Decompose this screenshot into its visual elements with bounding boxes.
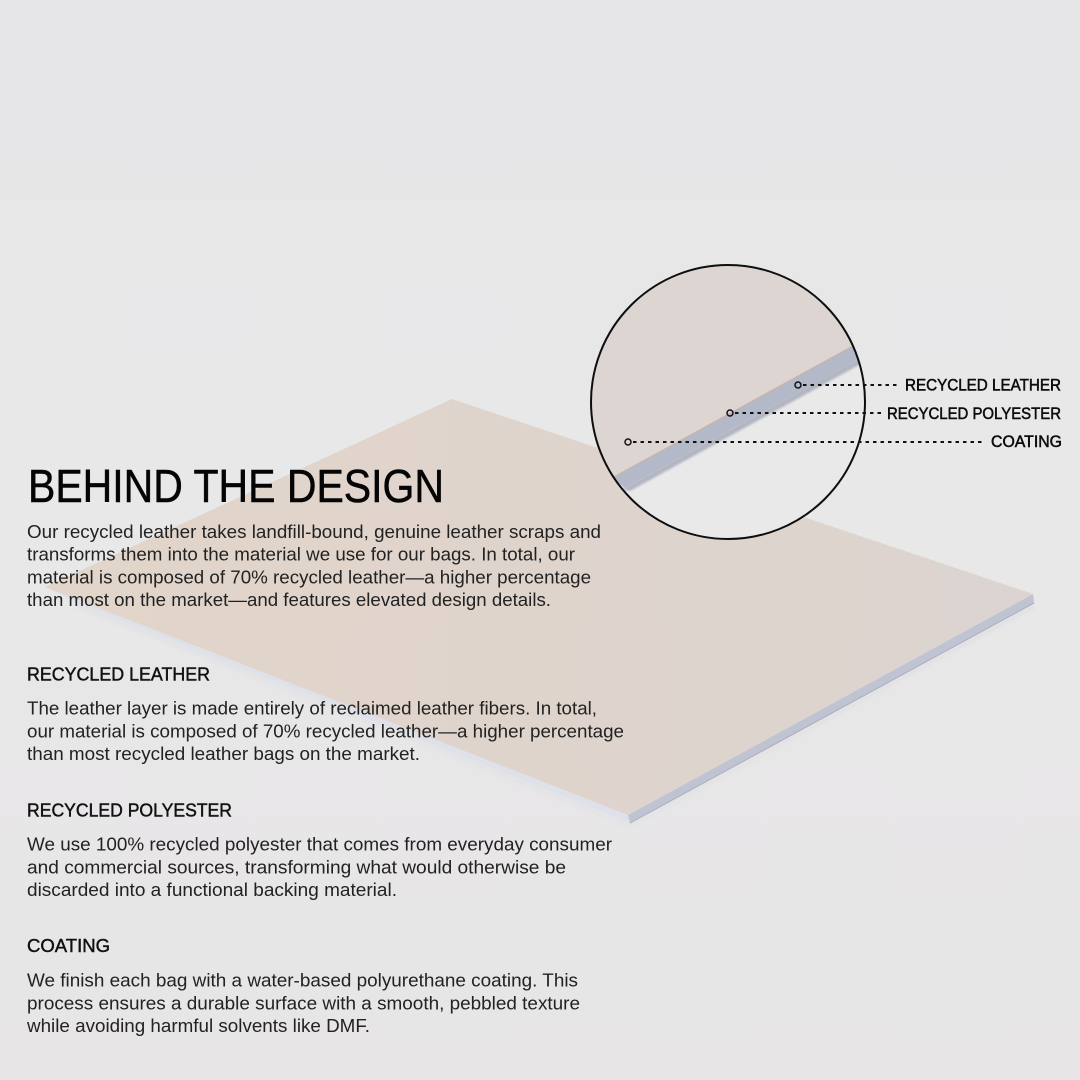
- intro text: [27, 521, 601, 610]
- callout: recycled leather: RECYCLED LEATHER: [905, 376, 1061, 394]
- text: recycled leather: The leather layer is made entirely of reclaimed leather fibers. In total,: [27, 698, 597, 718]
- text: recycled leather: our material is composed of 70% recycled leather—a higher percentage: [27, 720, 624, 742]
- text: recycled leather: [27, 698, 624, 764]
- text: recycled polyester: We use 100% recycled polyester that comes from everyday consumer: [27, 834, 612, 854]
- text: recycled polyester: discarded into a functional backing material.: [27, 879, 397, 900]
- heading: recycled polyester: RECYCLED POLYESTER: [27, 800, 232, 820]
- magnifier circle: [590, 264, 866, 540]
- text: coating: process ensures a durable surface with a smooth, pebbled texture: [27, 992, 580, 1014]
- text: coating: [26, 970, 580, 1036]
- callout: coating: [625, 432, 1062, 451]
- callout: coating: COATING: [991, 432, 1062, 451]
- magnified layers edge: [612, 346, 860, 488]
- text: recycled polyester: and commercial sources, transforming what would otherwise be: [27, 856, 566, 878]
- text: recycled polyester: [27, 834, 612, 900]
- text: coating: We finish each bag with a water-based polyurethane coating. This: [27, 970, 578, 990]
- intro text: Our recycled leather takes landfill-bound, genuine leather scraps and: [27, 521, 601, 542]
- intro text: than most on the market—and features elevated design details.: [27, 589, 551, 610]
- text: coating: while avoiding harmful solvents like DMF.: [26, 1015, 370, 1036]
- heading: recycled leather: RECYCLED LEATHER: [27, 664, 210, 684]
- title: BEHIND THE DESIGN: [28, 460, 444, 512]
- callout: recycled polyester: RECYCLED POLYESTER: [887, 404, 1061, 423]
- leather sheet: [45, 399, 1034, 827]
- intro text: material is composed of 70% recycled leather—a higher percentage: [27, 566, 591, 588]
- callout: recycled polyester: [727, 404, 1061, 423]
- intro text: transforms them into the material we use for our bags. In total, our: [27, 544, 575, 564]
- callout: recycled leather: [795, 376, 1061, 394]
- magnified leather surface: [592, 266, 852, 476]
- text: recycled leather: than most recycled leather bags on the market.: [27, 743, 420, 764]
- heading: coating: COATING: [27, 935, 110, 956]
